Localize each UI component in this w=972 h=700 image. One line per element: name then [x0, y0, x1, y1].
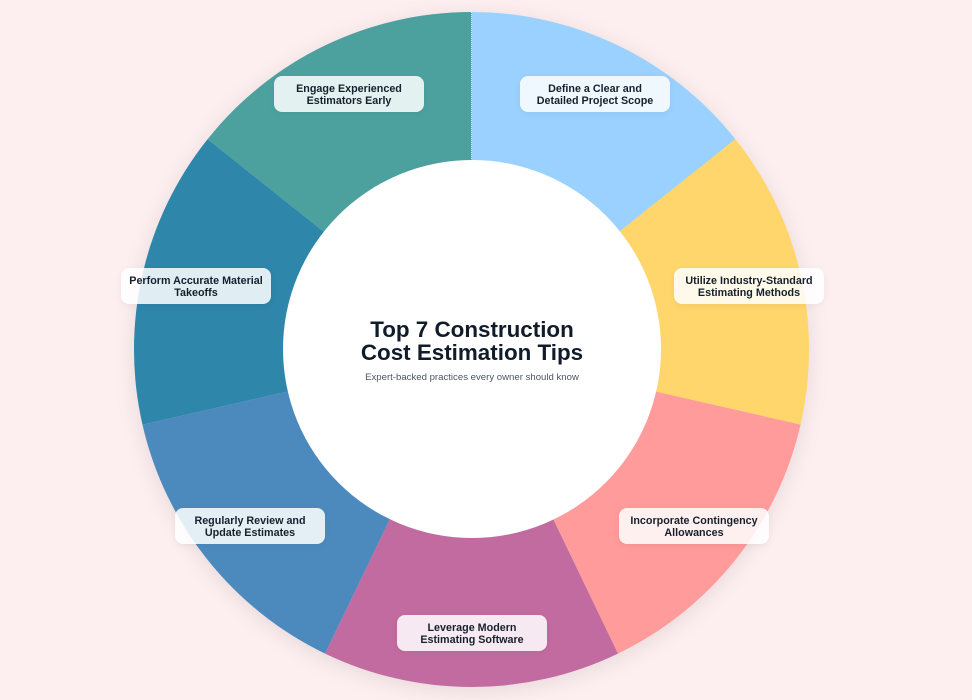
segment: estimators — [208, 12, 472, 350]
center panel — [283, 160, 661, 538]
segment: define scope — [472, 12, 735, 350]
label: review: Regularly Review and — [194, 514, 306, 526]
label: contingency — [619, 508, 769, 544]
label: contingency: Allowances — [664, 526, 724, 538]
label: takeoffs: Takeoffs — [174, 286, 218, 298]
segment: industry methods — [472, 139, 809, 425]
segment: takeoffs — [134, 139, 471, 425]
segment: software — [325, 350, 618, 687]
segment: contingency — [472, 350, 801, 654]
label: takeoffs: Perform Accurate Material — [129, 274, 263, 286]
label: takeoffs — [121, 268, 271, 304]
title — [361, 317, 583, 365]
label: define scope: Detailed Project Scope — [537, 94, 653, 106]
label: software — [397, 615, 547, 651]
label: estimators: Engage Experienced — [296, 82, 402, 94]
label: contingency: Incorporate Contingency — [630, 514, 758, 526]
segment: review — [142, 350, 471, 654]
label: review — [175, 508, 325, 544]
label: define scope — [520, 76, 670, 112]
label: industry methods: Estimating Methods — [698, 286, 800, 298]
label: industry methods — [674, 268, 824, 304]
title: Cost Estimation Tips — [361, 340, 583, 365]
label: software: Leverage Modern — [427, 622, 516, 634]
title: Top 7 Construction — [370, 317, 574, 342]
label: review: Update Estimates — [205, 526, 295, 538]
label: industry methods: Utilize Industry-Standard — [685, 274, 813, 286]
label: software: Estimating Software — [420, 634, 524, 646]
label: define scope: Define a Clear and — [548, 82, 642, 94]
subtitle: Expert-backed practices every owner should know — [365, 372, 579, 383]
label: estimators — [274, 76, 424, 112]
label: estimators: Estimators Early — [307, 94, 391, 106]
